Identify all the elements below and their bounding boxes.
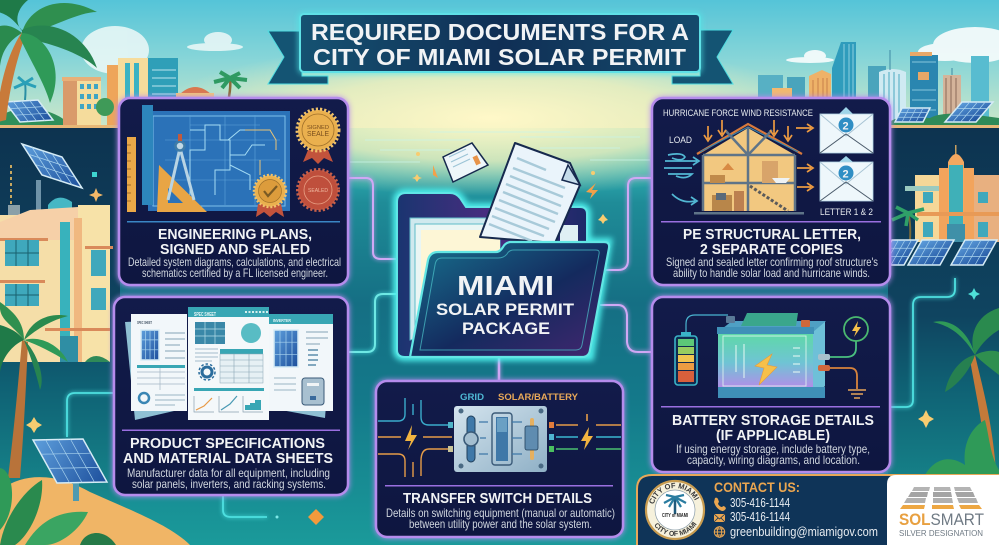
- folder inner line: [420, 250, 599, 350]
- divider: [661, 406, 880, 408]
- background: sky: [0, 0, 999, 129]
- background: sun glow: [150, 40, 830, 196]
- icon: ruler: [127, 137, 136, 212]
- icon: envelope copy 2: [820, 156, 873, 201]
- panel card: [652, 98, 890, 285]
- sparkles around folder: [412, 152, 608, 224]
- wires right: [549, 414, 621, 452]
- banner body: [300, 14, 700, 72]
- icon: wiring and ground: [818, 317, 868, 398]
- panel card: [119, 98, 348, 285]
- divider: [661, 221, 881, 222]
- description: capacity, wiring diagrams, and location.: [687, 453, 860, 467]
- connector: folder to transfer switch: [498, 358, 500, 380]
- art deco building right: [892, 145, 999, 242]
- connector: bottom decorative: [223, 496, 267, 517]
- icon: envelope copy 1: [820, 107, 873, 153]
- description: Details on switching equipment (manual or automatic): [386, 506, 615, 520]
- heading: ENGINEERING PLANS,: [158, 227, 312, 243]
- icon: check seal: [254, 175, 286, 217]
- panel: PE structural letter: [652, 98, 890, 285]
- folder glow: [397, 193, 608, 357]
- icon: solar panel row right: [878, 240, 997, 265]
- title line 1: REQUIRED DOCUMENTS FOR A: [311, 19, 689, 45]
- title banner: [268, 14, 733, 84]
- panel card: [114, 297, 348, 495]
- heading: [158, 227, 312, 258]
- right dark band: [888, 128, 999, 545]
- description: solar panels, inverters, and racking systems.: [132, 477, 326, 491]
- document: small sheet: [443, 143, 488, 182]
- icon: solar panel top left: [5, 100, 53, 122]
- badge background: [887, 475, 999, 545]
- icon: main battery: [717, 313, 826, 398]
- city of miami seal: CITY OF MIAMI: [649, 482, 700, 504]
- background: water streaks: [350, 132, 650, 162]
- icon: switch plate: [454, 406, 547, 472]
- art deco building left: [0, 198, 113, 362]
- divider: [122, 430, 340, 431]
- description: Signed and sealed letter confirming roof structure's: [666, 255, 878, 269]
- description: [127, 466, 330, 491]
- panel: battery storage: [652, 297, 890, 472]
- sheet: left spec sheet: SPEC SHEET: [137, 320, 152, 325]
- sheet: center spec sheet: SPEC SHEET: [194, 312, 216, 318]
- folder label: [436, 270, 575, 338]
- heading: BATTERY STORAGE DETAILS: [672, 413, 874, 429]
- panel card: [652, 297, 890, 472]
- heading: [672, 413, 874, 444]
- connector: battery to folder: [600, 305, 652, 352]
- contact heading: CONTACT US:: [714, 480, 800, 495]
- divider: [385, 485, 613, 486]
- connector: dot and diamond: [276, 509, 324, 525]
- solsmart wordmark: SOLSMART: [899, 511, 984, 529]
- description: Detailed system diagrams, calculations, and electrical: [128, 255, 341, 269]
- heading: AND MATERIAL DATA SHEETS: [123, 451, 333, 467]
- description: ability to handle solar load and hurricane winds.: [673, 266, 870, 280]
- folder front: [410, 242, 609, 357]
- connector: left decorative: [67, 393, 113, 437]
- folder label: PACKAGE: [462, 319, 550, 338]
- icon: set square: [157, 165, 207, 212]
- clouds left: [81, 26, 243, 74]
- divider: [127, 221, 340, 222]
- description: [128, 255, 341, 280]
- icon: phone: [714, 498, 726, 511]
- icon: red seal: SEALED: [308, 188, 328, 194]
- icon: blueprint: [142, 105, 290, 211]
- phone number: 305-416-1144: [730, 495, 790, 510]
- icon: envelope copy 1: 2: [842, 120, 849, 132]
- description: [676, 442, 870, 467]
- heading: TRANSFER SWITCH DETAILS: [403, 491, 592, 507]
- contact background: [637, 475, 999, 545]
- heading: [123, 436, 333, 467]
- designation: SILVER DESIGNATION: [899, 528, 983, 538]
- second number: 305-416-1144: [730, 509, 790, 524]
- banner glow: [300, 14, 700, 72]
- sheet: left spec sheet: [131, 314, 187, 411]
- envelope label: LETTER 1 & 2: [820, 207, 873, 218]
- panel: engineering plans: [119, 98, 348, 285]
- background: sea: [0, 128, 999, 545]
- panel card: [376, 381, 623, 537]
- connector: structural letter to folder: [600, 178, 652, 270]
- load label: LOAD: [669, 135, 692, 146]
- description: between utility power and the solar system.: [409, 517, 592, 531]
- contact box: [636, 474, 999, 545]
- solsmart badge: [887, 475, 999, 545]
- icon: gold seal: [297, 109, 339, 164]
- solar battery label: SOLAR/BATTERY: [498, 392, 579, 403]
- sheet: right inverter sheet: [269, 314, 333, 411]
- heading: PE STRUCTURAL LETTER,: [683, 227, 861, 243]
- beach sand: [0, 477, 190, 545]
- heading: (IF APPLICABLE): [716, 428, 830, 444]
- city of miami seal: CITY OF MIAMI: [654, 522, 696, 536]
- diagram label: HURRICANE FORCE WIND RESISTANCE: [663, 108, 813, 119]
- city of miami seal: [644, 480, 706, 540]
- icon: red seal: [298, 170, 338, 210]
- ribbon right tail: [672, 30, 733, 84]
- mid left solar panel and pole: [11, 144, 103, 210]
- folder back: [397, 193, 587, 357]
- icon: solar panels top right: [895, 102, 993, 122]
- icon: load and wind arrows: [664, 120, 813, 205]
- icon: solar panel lower left: [33, 439, 107, 501]
- document: large sheet: [480, 143, 580, 243]
- icon: charge level battery: [675, 315, 728, 385]
- description: schematics certified by a FL licensed engineer.: [142, 266, 328, 280]
- icon: compass: [168, 134, 194, 200]
- city of miami seal: CITY of MIAMI: [662, 513, 688, 519]
- connector: right decorative: [890, 278, 955, 407]
- icon: mail: [714, 514, 725, 522]
- sparkles right: [918, 288, 980, 428]
- inner sheets: [410, 218, 578, 340]
- left dark band: [0, 128, 120, 545]
- palm tree top left: [0, 0, 97, 122]
- sparkle lower left: [26, 417, 42, 433]
- palm tree lower left with building edge: [0, 302, 68, 478]
- folder label: SOLAR PERMIT: [436, 300, 575, 319]
- stacked back sheets: [125, 320, 333, 420]
- email: greenbuilding@miamigov.com: [730, 524, 878, 539]
- icon: globe: [714, 527, 725, 537]
- right skyline: [758, 42, 999, 128]
- icon: envelope copy 2: 2: [842, 168, 849, 180]
- panel: transfer switch: [376, 381, 623, 537]
- connector: product specs to folder: [348, 294, 398, 352]
- wires left: [378, 398, 453, 477]
- title line 2: CITY OF MIAMI SOLAR PERMIT: [313, 44, 687, 70]
- sheet: right inverter sheet: INVERTER: [273, 318, 292, 323]
- ribbon left tail: [268, 31, 328, 84]
- foliage bottom left: [0, 468, 116, 545]
- heading: SIGNED AND SEALED: [160, 242, 310, 258]
- description: Manufacturer data for all equipment, including: [127, 466, 330, 480]
- connector: engineering plans to folder: [348, 178, 398, 259]
- icon: gold seal: SIGNED: [307, 125, 329, 131]
- heading: [683, 227, 861, 258]
- panel: product specifications: [114, 297, 348, 495]
- description: If using energy storage, include battery type,: [676, 442, 870, 456]
- heading: 2 SEPARATE COPIES: [700, 242, 843, 258]
- description: [386, 506, 615, 531]
- heading: PRODUCT SPECIFICATIONS: [130, 436, 325, 452]
- description: [666, 255, 878, 280]
- icon: house cross-section: [694, 124, 804, 214]
- icon: gold seal: SEALE: [307, 131, 329, 138]
- grid label: GRID: [460, 392, 484, 403]
- left skyline: [0, 58, 247, 128]
- central folder: [397, 143, 609, 357]
- palm tree lower right: [925, 308, 999, 476]
- folder label: MIAMI: [457, 270, 554, 301]
- sheet: center spec sheet: [188, 307, 269, 420]
- clouds right: [786, 27, 999, 63]
- logo panels: [900, 487, 982, 509]
